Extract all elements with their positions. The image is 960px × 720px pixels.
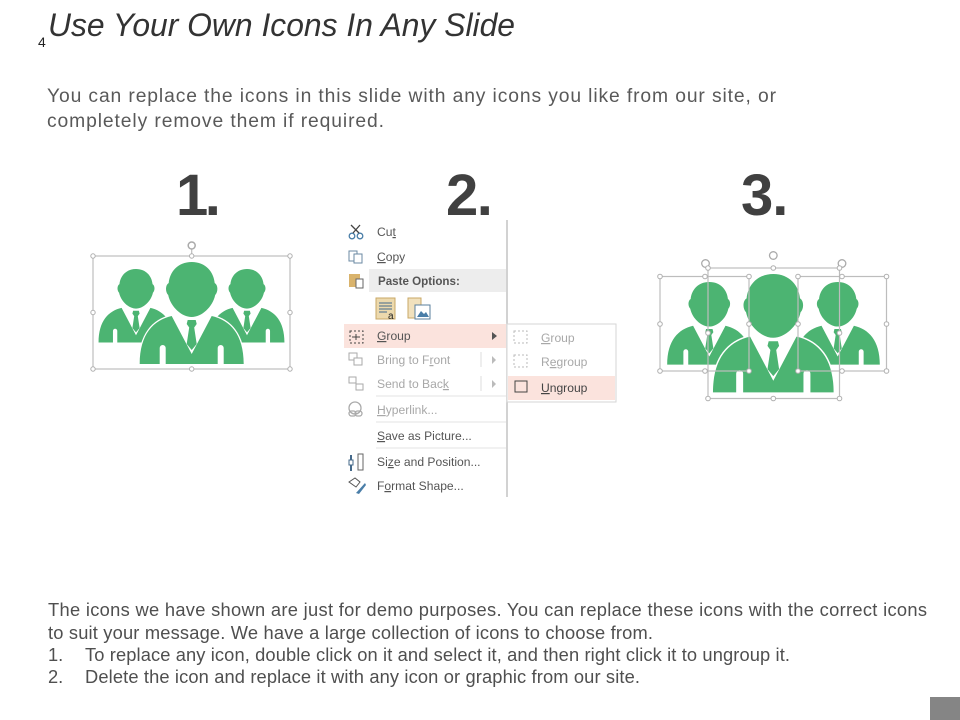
- step number 2: 2.: [446, 163, 491, 228]
- group highlight row: [344, 324, 506, 348]
- icon: paste picture: [408, 298, 430, 319]
- intro text: [47, 86, 777, 132]
- title: Use Your Own Icons In Any Slide: [48, 7, 515, 43]
- icon: size and position: [349, 454, 363, 471]
- icon: paste text: a: [388, 311, 394, 322]
- submenu panel: [507, 324, 616, 402]
- submenu panel: Group: [541, 331, 575, 345]
- context menu: Format Shape...: [377, 479, 464, 493]
- icon: copy: [349, 251, 362, 263]
- footer instructions: Delete the icon and replace it with any icon or graphic from our site.: [85, 666, 640, 687]
- footer instructions: 2.: [48, 666, 63, 687]
- context menu: Size and Position...: [377, 455, 481, 469]
- icon: hyperlink: [349, 402, 362, 416]
- intro text: completely remove them if required.: [47, 111, 384, 132]
- icon: group: [350, 331, 363, 343]
- context menu: [344, 220, 616, 497]
- step number 1: 1.: [176, 163, 218, 228]
- paste options header: [369, 269, 506, 292]
- icon: paste: [349, 274, 363, 288]
- footer instructions: [48, 599, 927, 687]
- menu labels: Cut: [377, 225, 396, 239]
- icon: send to back: [349, 377, 363, 390]
- step number 3: 3.: [741, 163, 787, 228]
- context menu: Group: [377, 329, 411, 343]
- submenu panel: Ungroup: [541, 381, 588, 395]
- context menu: Copy: [377, 250, 406, 264]
- footer instructions: 1.: [48, 644, 63, 665]
- context menu: Send to Back: [377, 377, 450, 391]
- corner tab: [930, 697, 960, 720]
- context menu: Hyperlink...: [377, 403, 438, 417]
- icon group 3: ungrouped team icons with separate selection boxes: [658, 252, 889, 401]
- icon group 1: grouped team icon with one selection box: [91, 242, 292, 371]
- footer instructions: To replace any icon, double click on it and select it, and then right click it to ungroup it.: [85, 644, 790, 665]
- footer instructions: The icons we have shown are just for demo purposes. You can replace these icons with the correct icons: [48, 599, 927, 620]
- icon: cut: [349, 225, 363, 239]
- context menu: Save as Picture...: [377, 429, 472, 443]
- submenu arrows: [492, 332, 497, 340]
- submenu panel: Regroup: [541, 355, 588, 369]
- footer instructions: to suit your message. We have a large collection of icons to choose from.: [48, 622, 653, 643]
- context menu: Bring to Front: [377, 353, 451, 367]
- intro text: You can replace the icons in this slide with any icons you like from our site, or: [47, 86, 777, 107]
- page number: 4: [38, 34, 46, 50]
- context menu: Paste Options:: [378, 275, 460, 288]
- icon: bring to front: [349, 353, 362, 365]
- icon: paste text: [376, 298, 395, 322]
- icon: format shape: [349, 478, 366, 494]
